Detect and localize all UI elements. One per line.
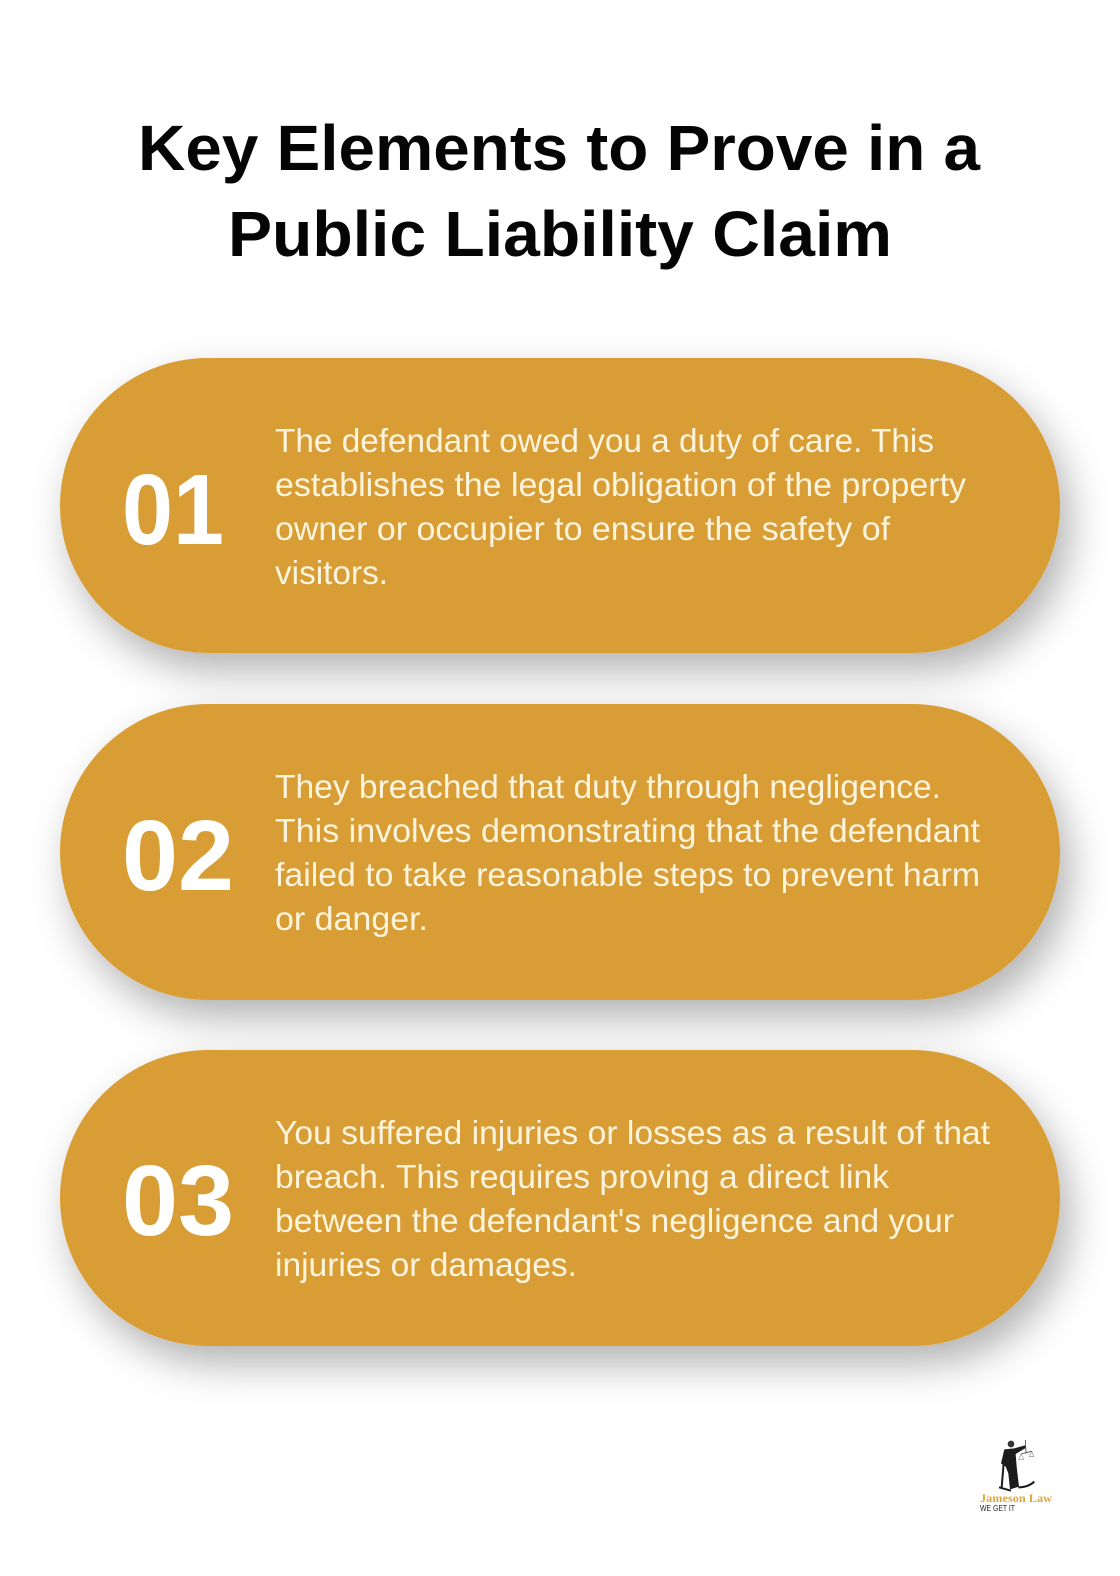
text block 03: breach. This requires proving a direct link [275, 1158, 889, 1195]
text block 02: They breached that duty through negligence. [275, 768, 941, 805]
number 03: 03 [122, 1145, 234, 1257]
number 01: 01 [122, 454, 224, 566]
text block 03: injuries or damages. [275, 1246, 577, 1283]
text block 02: or danger. [275, 900, 428, 937]
title [138, 112, 980, 270]
panel: element 02 [60, 704, 1060, 1000]
logo: Jameson Law [980, 1440, 1052, 1513]
text block 01: establishes the legal obligation of the property [275, 466, 967, 503]
text block 01: visitors. [275, 554, 388, 591]
text block 02: failed to take reasonable steps to prevent harm [275, 856, 980, 893]
text block 02: This involves demonstrating that the defendant [275, 812, 980, 849]
pill background 03 [60, 1050, 1060, 1346]
text block 01 [275, 422, 967, 591]
text block 01: owner or occupier to ensure the safety of [275, 510, 891, 547]
icon: lady justice [999, 1440, 1034, 1491]
text block 03 [275, 1114, 990, 1283]
text block 01: The defendant owed you a duty of care. This [275, 422, 934, 459]
panel: element 01 [60, 358, 1060, 653]
pill background 01 [60, 358, 1060, 653]
text block 03: between the defendant's negligence and your [275, 1202, 954, 1239]
text block 03: You suffered injuries or losses as a result of that [275, 1114, 990, 1151]
title: Key Elements to Prove in a [138, 112, 980, 184]
number 02: 02 [122, 800, 234, 912]
pill background 02 [60, 704, 1060, 1000]
logo name: Jameson Law [980, 1491, 1052, 1505]
logo tagline: WE GET IT [980, 1504, 1015, 1513]
panel: element 03 [60, 1050, 1060, 1346]
text block 02 [275, 768, 980, 937]
title: Public Liability Claim [228, 198, 892, 270]
